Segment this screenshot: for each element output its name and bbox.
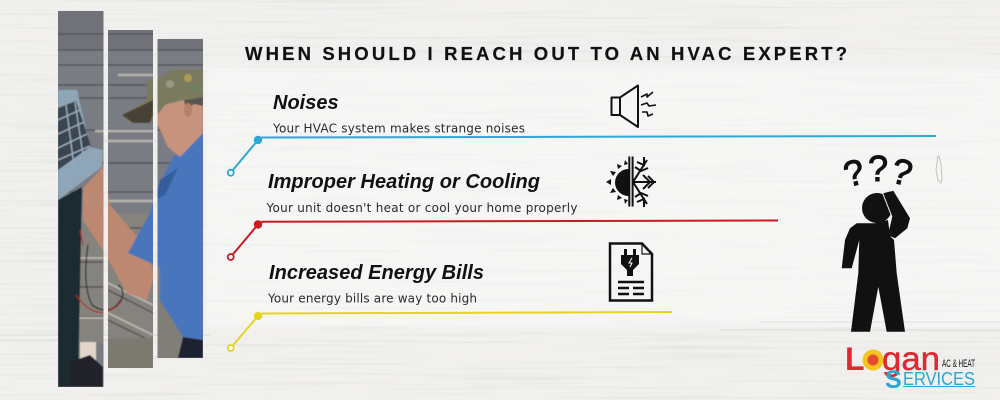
description: noises: Your HVAC system makes strange noises bbox=[272, 122, 525, 136]
icon: energy bill document bbox=[610, 244, 652, 300]
icon: speaker with noise waves bbox=[612, 86, 656, 127]
logo wordmark: Logan: L bbox=[845, 341, 865, 377]
logo text: Services: S bbox=[885, 366, 902, 394]
air conditioner unit bbox=[58, 90, 103, 200]
logo: Logan AC & Heat Services: ERVICES bbox=[903, 369, 975, 389]
logo: Logan AC & Heat Services bbox=[845, 340, 975, 394]
description: improper heating or cooling: Your unit doesn't heat or cool your home properly bbox=[266, 201, 578, 215]
item: improper heating or cooling bbox=[228, 156, 778, 260]
connector line: blue bbox=[228, 136, 936, 176]
wires bbox=[86, 245, 123, 310]
question marks: ? bbox=[868, 148, 888, 189]
title: WHEN SHOULD I REACH OUT TO AN HVAC EXPERT? bbox=[245, 43, 847, 64]
item: increased energy bills bbox=[228, 244, 672, 351]
line separating hand from head bbox=[883, 194, 892, 217]
photo: technician servicing an outdoor AC unit bbox=[58, 11, 203, 387]
description: increased energy bills: Your energy bills are way too high bbox=[267, 292, 477, 306]
trousers bbox=[178, 337, 203, 358]
connector line: yellow bbox=[228, 312, 672, 351]
heading: noises: Noises bbox=[273, 92, 339, 114]
shirt bbox=[128, 131, 203, 340]
item: noises bbox=[228, 86, 936, 176]
icon: sun and snowflake bbox=[606, 156, 656, 207]
connector line: red bbox=[228, 220, 778, 260]
logo: Logan AC & Heat Services: gan bbox=[882, 340, 940, 377]
heading: improper heating or cooling: Improper Heating or Cooling bbox=[268, 171, 540, 193]
items at base bbox=[80, 342, 96, 362]
question marks bbox=[839, 148, 917, 195]
face bbox=[157, 100, 203, 157]
head bbox=[862, 193, 892, 223]
question marks: ? bbox=[887, 150, 917, 194]
confused person figure bbox=[839, 148, 917, 332]
camo cap bbox=[122, 69, 203, 123]
hand and arm bbox=[83, 167, 155, 300]
body and arms bbox=[842, 220, 905, 332]
logo text: AC & Heat: AC & HEAT bbox=[942, 358, 975, 370]
question marks: ? bbox=[839, 151, 869, 195]
heading: increased energy bills: Increased Energy Bills bbox=[269, 262, 484, 284]
